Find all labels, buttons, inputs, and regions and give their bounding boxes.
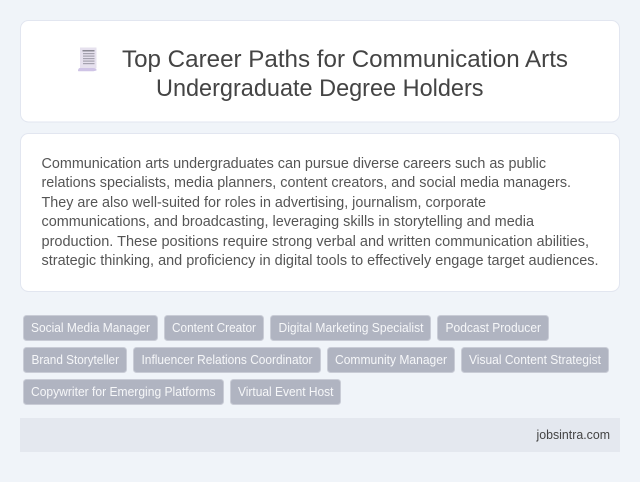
tag: Community Manager: Community Manager (335, 353, 447, 367)
tag: Digital Marketing Specialist: Digital Marketing Specialist (278, 321, 424, 335)
text block: description: production. These positions require strong verbal and written communication abilities, (42, 234, 589, 250)
tag: Influencer Relations Coordinator (134, 348, 320, 372)
title: Top Career Paths for Communication Arts (122, 46, 568, 73)
tag: Content Creator: Content Creator (172, 321, 256, 335)
tag: Virtual Event Host: Virtual Event Host (238, 385, 334, 399)
tag: Social Media Manager (24, 316, 158, 340)
tag: Influencer Relations Coordinator: Influencer Relations Coordinator (142, 353, 312, 367)
text block: description: Communication arts undergraduates can pursue diverse careers such as public (42, 156, 547, 172)
tag: Community Manager (328, 348, 454, 372)
text block: description (42, 156, 598, 269)
panel: header (20, 20, 620, 122)
career tags (24, 316, 608, 404)
tag: Brand Storyteller (24, 348, 126, 372)
tag: Brand Storyteller: Brand Storyteller (32, 353, 119, 367)
text block: description: strategic thinking, and proficiency in digital tools to effectively engage target audiences. (42, 253, 598, 269)
tag: Podcast Producer (438, 316, 548, 340)
text block: description: relations specialists, media planners, content creators, and social media managers. (42, 175, 571, 191)
tag: Copywriter for Emerging Platforms (24, 380, 224, 404)
title: Undergraduate Degree Holders (156, 75, 484, 102)
tag: Virtual Event Host (230, 380, 340, 404)
tag: Content Creator (164, 316, 264, 340)
text block: description: communications, and broadcasting, leveraging skills in storytelling and media (42, 214, 535, 230)
tag: Visual Content Strategist: Visual Content Strategist (469, 353, 601, 367)
title (122, 46, 568, 102)
tag: Copywriter for Emerging Platforms: Copywriter for Emerging Platforms (31, 385, 216, 399)
tag: Digital Marketing Specialist (270, 316, 430, 340)
icon: document scroll (78, 48, 96, 71)
tag: Social Media Manager: Social Media Manager (31, 321, 150, 335)
footer (20, 418, 620, 452)
tag: Podcast Producer: Podcast Producer (446, 321, 541, 335)
tag: Visual Content Strategist (462, 348, 608, 372)
footer source text: jobsintra.com (536, 428, 610, 442)
text block: description: They are also well-suited for roles in advertising, journalism, corporate (42, 195, 486, 211)
panel: description (20, 134, 620, 292)
